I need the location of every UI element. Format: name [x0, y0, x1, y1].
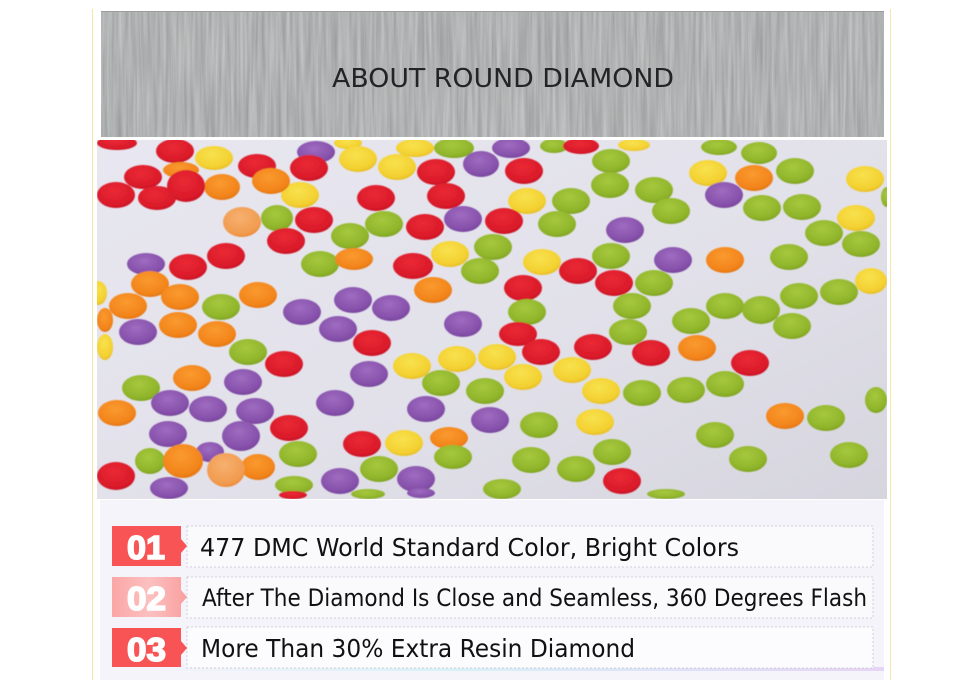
item 01: 477 DMC World Standard Color, Bright Colors [200, 533, 739, 562]
item 01: 01 [127, 529, 165, 566]
item 02: After The Diamond Is Close and Seamless, 360 Degrees Flash [202, 584, 867, 612]
item 02 [112, 577, 873, 618]
header banner [101, 11, 884, 137]
item 01 [112, 526, 873, 567]
item 03: 03 [127, 631, 166, 668]
item 03 [112, 627, 873, 668]
title: ABOUT ROUND DIAMOND [332, 64, 674, 94]
item 03: More Than 30% Extra Resin Diamond [201, 634, 635, 663]
item 02: 02 [127, 580, 166, 617]
photo: scattered resin diamonds [89, 136, 893, 499]
panel: feature list [100, 500, 884, 680]
